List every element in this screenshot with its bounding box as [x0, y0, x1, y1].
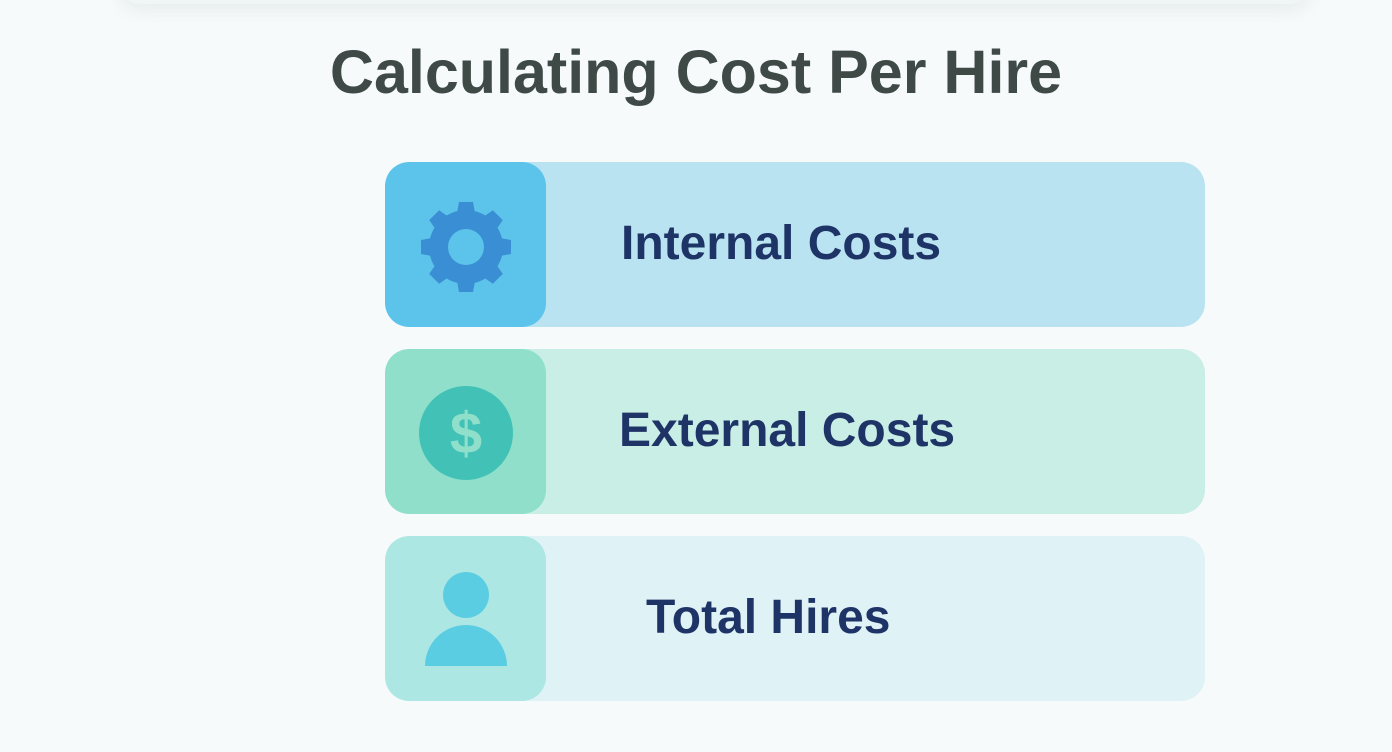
panel: total hires — [385, 536, 1205, 701]
panel: internal costs — [385, 162, 1205, 327]
label: Total Hires — [646, 591, 890, 644]
title: Calculating Cost Per Hire — [330, 38, 1062, 106]
label: Internal Costs — [621, 217, 941, 270]
icon: dollar: $ — [450, 401, 482, 466]
icon: person — [385, 536, 546, 701]
label: External Costs — [619, 404, 955, 457]
icon: gear — [385, 162, 546, 327]
panel: external costs — [385, 349, 1205, 514]
icon: dollar — [385, 349, 546, 514]
